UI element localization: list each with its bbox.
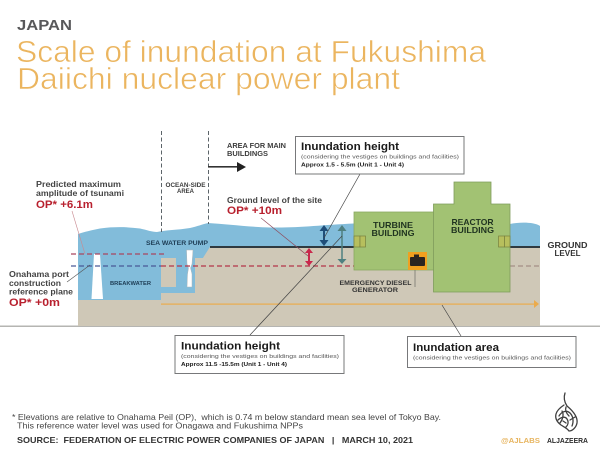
- footnote: * Elevations are relative to Onahama Peil (OP), which is 0.74 m below standard mean sea level of Tokyo Bay.: [12, 413, 441, 422]
- callout: inundation height upper: Approx 1.5 - 5.5m (Unit 1 - Unit 4): [301, 162, 404, 168]
- header label: JAPAN: [17, 18, 72, 34]
- building labels: BUILDING: [451, 225, 494, 235]
- building labels: REACTOR: [452, 217, 494, 227]
- arrow: site height: [305, 248, 313, 266]
- callout: inundation height upper: [296, 136, 464, 174]
- title: [16, 34, 487, 96]
- arrow: towards main buildings: [208, 162, 246, 172]
- callout: inundation area: Inundation area: [413, 342, 500, 354]
- area for main buildings label: [227, 143, 286, 158]
- callout: inundation height lower: (considering the vestiges on buildings and facilities): [181, 354, 339, 360]
- callout: predicted tsunami: OP* +6.1m: [36, 199, 93, 211]
- callout: reference plane: reference plane: [9, 288, 74, 296]
- callout: inundation height upper: Inundation height: [301, 141, 399, 153]
- callout: predicted tsunami: [36, 180, 124, 254]
- ground level label: LEVEL: [554, 249, 581, 258]
- callout: inundation area: [408, 336, 576, 368]
- callout: inundation height lower: Approx 11.5 -15.5m (Unit 1 - Unit 4): [181, 362, 287, 368]
- building labels: BUILDING: [372, 228, 415, 238]
- source line: SOURCE: FEDERATION OF ELECTRIC POWER COMPANIES OF JAPAN | MARCH 10, 2021: [17, 435, 413, 445]
- building labels: [372, 217, 494, 238]
- title: Scale of inundation at Fukushima: [16, 34, 487, 69]
- callout: inundation height lower: [175, 336, 344, 374]
- icon: Al Jazeera logo: [556, 393, 577, 431]
- intake channel: [161, 258, 176, 287]
- zone boundaries: [162, 131, 208, 232]
- generator label: GENERATOR: [352, 287, 398, 294]
- callout: ground level of the site: Ground level of the site: [227, 196, 323, 205]
- building doors: [354, 236, 510, 247]
- title: Daiichi nuclear power plant: [17, 61, 400, 96]
- credit: Al Jazeera wordmark: ALJAZEERA: [547, 438, 588, 445]
- callout: reference plane: [9, 265, 90, 309]
- arrow: inundation 1.5-5.5m: [320, 225, 328, 246]
- callout: ground level of the site: [227, 196, 323, 256]
- sea water pump: [186, 250, 193, 287]
- callout: predicted tsunami: amplitude of tsunami: [36, 189, 124, 198]
- callout: inundation height lower: Inundation height: [181, 340, 280, 352]
- building labels: TURBINE: [373, 220, 413, 230]
- sea water pump label: SEA WATER PUMP: [146, 240, 209, 247]
- arrow: inundation 11.5-15.5m: [338, 225, 346, 264]
- footnote: This reference water level was used for Onagawa and Fukushima NPPs: [17, 422, 303, 430]
- ground level lines: [210, 246, 355, 248]
- footnote: [12, 413, 441, 430]
- port ground step: [78, 247, 540, 326]
- area for main buildings label: AREA FOR MAIN: [227, 143, 286, 150]
- generator label: EMERGENCY DIESEL: [340, 280, 412, 287]
- callout: ground level of the site: OP* +10m: [227, 205, 282, 217]
- callout: reference plane: Onahama port: [9, 270, 69, 279]
- breakwater label: BREAKWATER: [110, 281, 151, 287]
- ground level label: GROUND: [548, 241, 588, 250]
- sea water and tsunami: [78, 223, 354, 300]
- reference lines: [71, 254, 540, 266]
- inundation area arrow: [161, 300, 539, 308]
- callout: reference plane: OP* +0m: [9, 297, 60, 309]
- callout: predicted tsunami: Predicted maximum: [36, 180, 121, 189]
- area for main buildings label: BUILDINGS: [227, 151, 268, 158]
- leader lines: [250, 174, 461, 336]
- ground: [78, 247, 540, 326]
- ocean-side area label: AREA: [177, 189, 195, 195]
- reactor building: [434, 182, 510, 292]
- credit: @AJLABS: @AJLABS: [501, 438, 540, 445]
- ocean-side area label: OCEAN-SIDE: [166, 183, 206, 189]
- callout: reference plane: construction: [9, 279, 61, 288]
- callout: inundation height upper: (considering the vestiges on buildings and facilities): [301, 154, 459, 160]
- breakwater: [92, 254, 103, 299]
- generator label: [340, 280, 412, 294]
- callout: inundation area: (considering the vestiges on buildings and facilities): [413, 356, 571, 362]
- turbine building: [354, 212, 434, 270]
- ocean-side area label: [166, 183, 206, 195]
- diagram: site cross-section: [71, 131, 540, 326]
- ground level label: [548, 241, 588, 258]
- icon: emergency generator: [408, 252, 427, 270]
- baseline: [0, 326, 600, 327]
